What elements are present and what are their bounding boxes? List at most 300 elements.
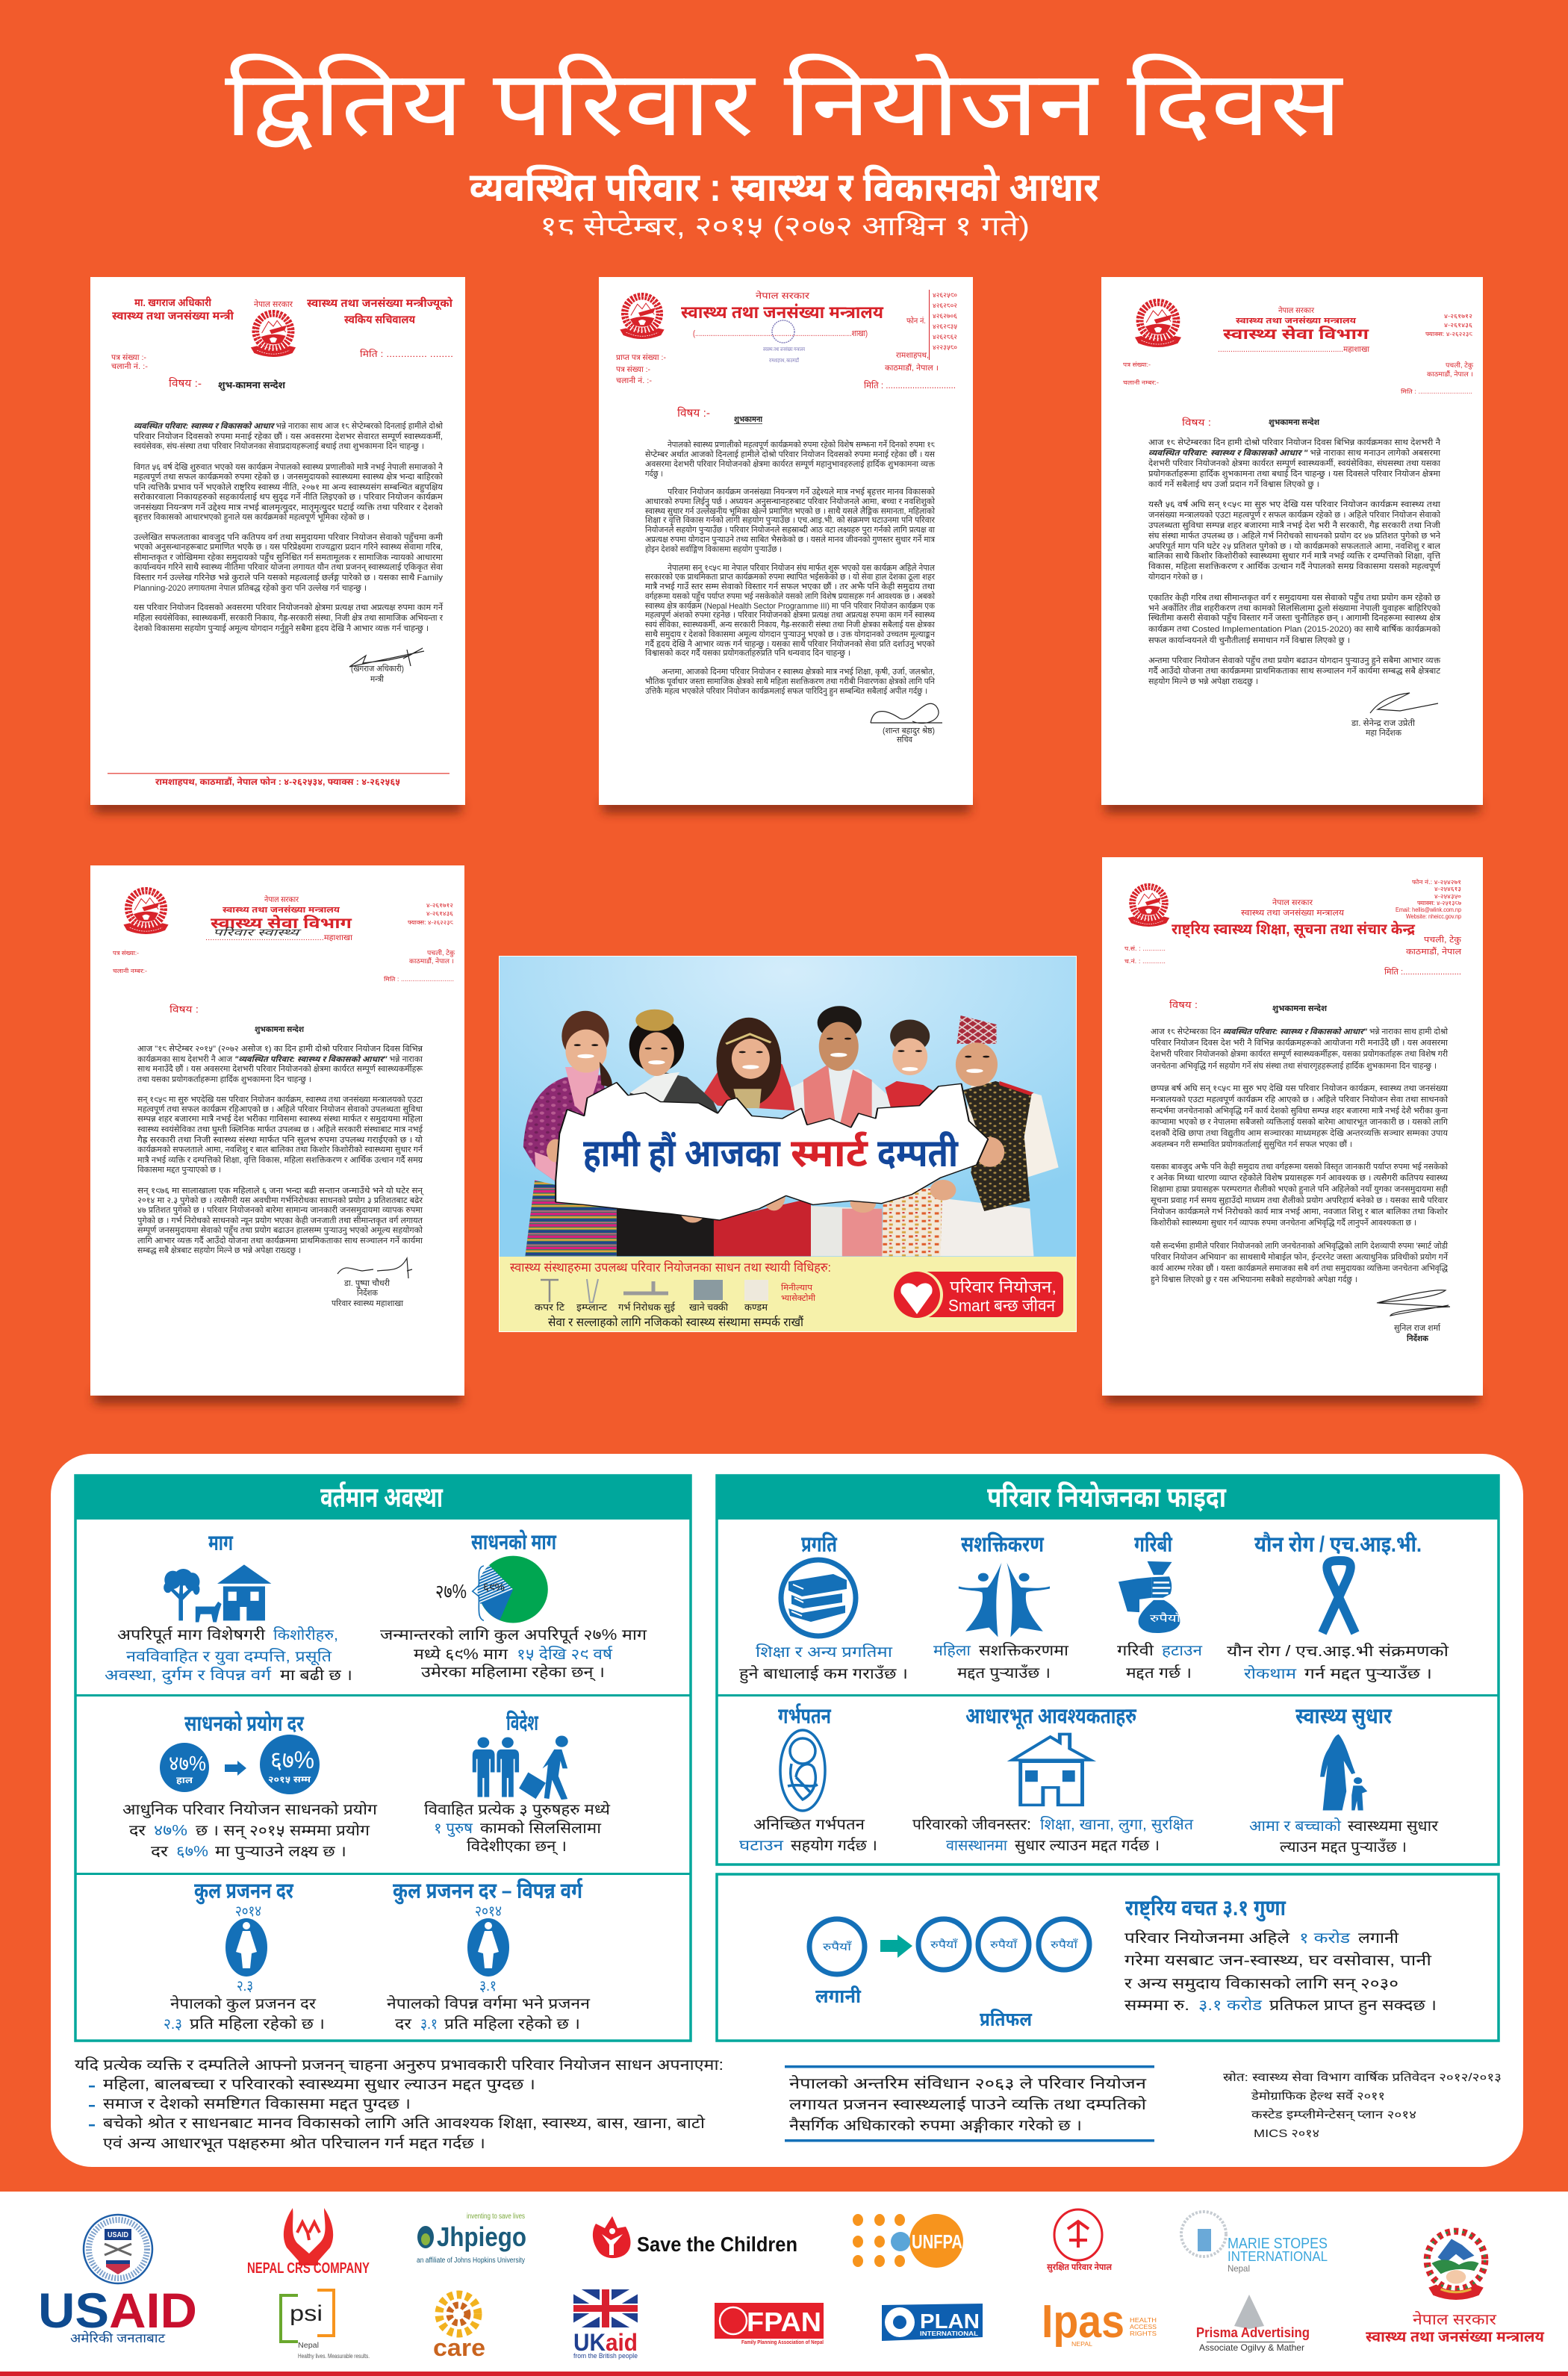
letter body text: उल्लेखित सफलताका बावजुद पनि कतिपय वर्ग तथा समुदायमा परिवार नियोजन सेवाको पहुँचमा कमी <box>134 532 443 543</box>
emblem: Nepal government <box>1128 886 1169 927</box>
letter body text: सम्पूर्ण जनसमुदायमा सेवाको पहुँच तथा प्रयोग बढाउन हालसम्म पुऱ्याउनु भएको अमूल्य सहयोगको <box>137 1225 423 1236</box>
letter body text: स्वास्थ्य सुधार गर्न उल्लेखनीय भूमिका खेल्ने प्रमाणित भएको छ । साथै यसले लैङ्गिक समानता, महिलाको <box>645 506 935 517</box>
letter body text: २०१४ मा २.३ पुगेको छ । त्यसैगरी यस अवधीमा गर्भनिरोधका साधनको प्रयोग ३ प्रतिशतबाट बढेर <box>137 1195 423 1205</box>
centre letterhead: शुभकामना सन्देश <box>1272 1003 1328 1014</box>
logo: Jhpiego: inventing to save lives <box>467 2212 525 2221</box>
letter body text: उत्तिकै महत्व भएकोले परिवार नियोजन कार्यक्रमलाई सफल पारिदिनु हुन सम्बन्धित सबैलाई अपील गर्दछु । <box>645 686 927 697</box>
department letterhead: पत्र संख्या:- <box>1123 361 1151 368</box>
heading: current status: वर्तमान अवस्था <box>320 1481 444 1514</box>
block: total fertility rate for the poor: ३.१ <box>420 2016 438 2033</box>
centre letterhead: Website: nheicc.gov.np <box>1406 913 1461 920</box>
letter body text: आज १८ सेप्टेम्बरका दिन हामी दोश्रो परिवार नियोजन दिवस बिभिन्न कार्यक्रमका साथ देशभरी नै <box>1148 438 1441 447</box>
diagram: investment to return: प्रतिफल <box>980 2008 1033 2030</box>
letter body text: देशभरी परिवार नियोजनको क्षेत्रमा कार्यरत सम्पूर्ण स्वास्थ्यकर्मीहरू, यसका प्रयोगकर्ताहरू तथा विशेष गरी <box>1151 1049 1448 1060</box>
division letterhead: नेपाल सरकार <box>264 895 299 904</box>
panel: letter from the health minister <box>90 277 465 812</box>
letter body text: आज १८ सेप्टेम्बरका दिन व्यवस्थित परिवार: स्वास्थ्य र विकासको आधार" भन्ने नाराका साथ हामी दोश्रो <box>1151 1027 1448 1036</box>
yellow strip of family planning methods: कण्डम <box>744 1301 768 1313</box>
department letterhead: ...........................................................महाशाखा <box>1218 346 1369 354</box>
block: basic needs: परिवारको जीवनस्तर: <box>912 1815 1031 1833</box>
minister letterhead: स्वकिय सचिवालय <box>344 314 415 326</box>
block: demand: मा बढी छ । <box>280 1666 352 1684</box>
logo: USAID seal <box>84 2215 152 2283</box>
letter body text: विगत ५६ वर्ष देखि शुरुवात भएको यस कार्यक्रम नेपालको स्वास्थ्य प्रणालीको मात्रै नभई नेपाली समाजको नै <box>134 462 444 472</box>
block: total fertility rate for the poor: दर <box>395 2016 412 2033</box>
text block: sources: स्रोत: स्वास्थ्य सेवा विभाग वार्षिक प्रतिवेदन २०१२/२०१३ <box>1223 2071 1502 2084</box>
logo: Ipas Nepal: NEPAL <box>1071 2341 1093 2348</box>
text block: if every person adopts family planning: यदि प्रत्येक व्यक्ति र दम्पतिले आफ्नो प्रजनन् चाहना अनुरुप प्रभावकारी परिवार नियोजन साधन अपनाएमा: <box>75 2056 724 2074</box>
block: abortion <box>739 1703 877 1854</box>
subtitle: व्यवस्थित परिवार : स्वास्थ्य र विकासको आधार <box>469 164 1100 210</box>
centre letterhead: च.नं. : ............ <box>1124 958 1166 965</box>
letter body text: गर्दै आउँदो योजना तथा कार्यक्रममा प्राथमिकताका साथ सञ्चालन गर्ने कार्यमा सम्बद्ध सबै क्षेत्रबाट <box>1148 665 1440 676</box>
ministry letterhead: शुभकामना <box>734 415 763 425</box>
icon: woman in oval <box>225 1918 267 1977</box>
letter body text: सन् १९५९ मा सुरु भएदेखि यस परिवार नियोजन कार्यक्रम, स्वास्थ्य तथा जनसंख्या मन्त्रालयको एउटा <box>137 1095 423 1104</box>
letter body text: जनसंख्या नियन्त्रण गर्ने उद्देश्य मात्र नभई बालमृत्युदर, मातृमृत्युदर घटाई व्यक्ति तथा परिवार र देशको <box>134 503 443 512</box>
letter body text: नियोजन कार्यक्रमले गर्भ निरोधको कार्य मात्र नभई आमा, नवजात शिशु र बाल बालिका तथा किशोर <box>1151 1207 1449 1216</box>
icon: tree, cow and house <box>164 1564 271 1622</box>
diagram: investment to return: रुपैयाँ <box>823 1940 852 1953</box>
slogan: हामी हौं आजका <box>583 1131 781 1175</box>
letter body text: पनि त्यत्तिकै प्रभाव पर्ने भएकोले राष्ट्रिय स्वास्थ्य नीति, २०७१ मा अन्य स्वास्थ्यसंग सम्बन्धित बहुपक्षिय <box>134 482 444 493</box>
letter body text: दशकौं देखि छापा तथा विद्युतीय आम सञ्चारका माध्यमहरू देखि अन्तरव्यक्ति सञ्चार सम्मका उपाय <box>1151 1128 1449 1138</box>
centre letterhead: Email: hellis@wlink.com.np <box>1396 906 1461 913</box>
yellow strip of family planning methods: खाने चक्की <box>689 1301 729 1313</box>
letter footer: रामशाहपथ, काठमाडौं, नेपाल फोन : ४-२६२५३४, फ्याक्स : ४-२६२५६५ <box>155 776 400 787</box>
letter body text: महत्वपूर्ण तथा सफल कार्यक्रमको रुपमा रहेको छ । जनसमुदायको स्वास्थ्यमा स्वास्थ्य क्षेत्र भन्दा बाहिरको <box>134 472 443 482</box>
emblem: Nepal government <box>123 891 169 934</box>
faces <box>574 1038 989 1058</box>
department letterhead: स्वास्थ्य तथा जनसंख्या मन्त्रालय <box>1236 316 1357 326</box>
letter body text: कार्यक्रमका साथ देशभरी नै आज "व्यवस्थित परिवार: स्वास्थ्य र विकासको आधार" भन्ने नाराका <box>137 1054 423 1064</box>
block: poverty <box>1117 1531 1203 1682</box>
division letterhead: ४-२६१७१२ <box>426 902 453 909</box>
callout: constitution: नेपालको अन्तरिम संविधान २०६३ ले परिवार नियोजन <box>789 2074 1147 2092</box>
callout: constitution: लगायत प्रजनन स्वास्थ्यलाई पाउने व्यक्ति तथा दम्पतिको <box>789 2095 1147 2113</box>
letter body text: व्यवस्थित परिवार: स्वास्थ्य र विकासको आधार " भन्ने नाराका साथ मनाउन लागेको अबसरमा <box>1148 448 1440 458</box>
letter body text: किशोरीको स्वास्थ्यमा सुधार गर्न व्यापक रुपमा जनचेतना अभिवृद्धि गर्दै लानुपर्ने आवश्यकता छ । <box>1151 1218 1416 1228</box>
letter body text: हुने विश्वास लिएको छु र यस अभियानमा सबैको सहयोगको अपेक्षा गर्दछु । <box>1151 1275 1357 1285</box>
block: abortion: सहयोग गर्दछ । <box>791 1836 877 1854</box>
department letterhead: फ्याक्स: ४-२६२२३८ <box>1425 331 1472 338</box>
letter body text: परिवार नियोजन अभियान' का साथसाथै मोबाईल फोन, ईन्टरनेट जस्ता अत्याधुनिक प्रविधीको प्रयोग गर्ने <box>1151 1252 1449 1262</box>
minister letterhead: शुभ-कामना सन्देश <box>218 379 286 392</box>
yellow strip of family planning methods: इम्प्लान्ट <box>576 1301 607 1313</box>
panel: campaign poster <box>499 956 1077 1332</box>
logo: UKaid: UKaid <box>573 2329 638 2356</box>
logo: USAID seal: USAID <box>108 2231 128 2239</box>
letter body text: कार्यक्रम तथा Costed Implementation Plan (2015-2020) का साथै बार्षिक कार्यक्रमको <box>1148 624 1440 634</box>
signature block: महा निर्देशक <box>1366 728 1402 738</box>
text block: sources: डेमोग्राफिक हेल्थ सर्वे २०११ <box>1251 2089 1385 2103</box>
letter body text: अपरिपूर्त माग पनि घटेर २५ प्रतिशत पुगेको छ । यो कार्यक्रमको सफलताले आमा, नवशिशु र बाल <box>1148 541 1441 552</box>
ministry letterhead: (...................................................................................शाखा) <box>693 329 868 338</box>
panel: letter from the health secretary <box>599 277 973 812</box>
icon: mother and child <box>1320 1734 1367 1810</box>
text: national savings: ३.१ करोड <box>1198 1996 1262 2014</box>
division letterhead: विषय : <box>169 1004 199 1015</box>
block: health improvement: स्वास्थ्यमा सुधार <box>1348 1818 1439 1835</box>
centre letterhead: नेपाल सरकार <box>1272 898 1313 907</box>
text: national savings: सम्ममा रु. <box>1124 1997 1189 2014</box>
block: abortion: गर्भपतन <box>778 1703 831 1729</box>
letter body text: बालिका साथै किशोर किशोरीको स्वास्थ्यमा सुधार गर्न मात्रै नभई व्यक्ति र दम्पत्तिको शिक्षा, वृत्ति <box>1148 551 1440 561</box>
yellow strip of family planning methods: स्वास्थ्य संस्थाहरुमा उपलब्ध परिवार नियोजनका साधन तथा स्थायी विधिहरु: <box>510 1260 831 1275</box>
text: national savings: गरेमा यसबाट जन-स्वास्थ्य, घर वसोवास, पानी <box>1124 1951 1432 1969</box>
signature block <box>349 648 424 684</box>
block: contraceptive demand: उमेरका महिलामा रहेका छन् । <box>421 1663 605 1682</box>
letter body text: स्वयं सेविका, स्वास्थ्यकर्मी, अन्य सरकारी निकाय, गैह्र-सरकारी संस्था तथा निजी क्षेत्रका सबैलाई यस क्षेत्रका <box>645 620 935 629</box>
block: demand: किशोरीहरु, <box>273 1626 338 1643</box>
logo: CARE <box>433 2295 485 2361</box>
block: total fertility rate for the poor: ३.१ <box>479 1978 497 1994</box>
signature block <box>332 1258 412 1308</box>
emblem: Nepal government <box>620 296 665 339</box>
letter body text: देशभरी परिवार नियोजनको क्षेत्रमा कार्यरत सम्पूर्ण स्वास्थ्यकर्मी, स्वयंसेविका, संघसस्था तथा यसका <box>1148 458 1440 469</box>
logo: UNFPA: UNFPA <box>912 2230 962 2253</box>
division letterhead: पचली, टेकु <box>427 948 455 957</box>
letter body text <box>645 440 936 697</box>
letter body text: सन्दर्भमा जनचेतनाको अभिवृद्धि गर्ने कार्य देशको सुविधा सम्पन्न शहर बजारमा मात्रै नभई देशै भरीका कुना <box>1151 1106 1448 1116</box>
text: national savings: राष्ट्रिय वचत ३.१ गुणा <box>1125 1895 1287 1922</box>
letter body text: आधारको रुपमा लिईनु पर्छ । अध्ययन अनुसन्धानहरुबाट परिवार नियोजनले आमा, बच्चा र नवशिशुको <box>645 497 935 506</box>
ministry letterhead: चलानी नं. :- <box>616 376 652 385</box>
block: poverty: मद्दत गर्छ । <box>1126 1664 1192 1682</box>
block: contraceptive demand <box>380 1529 647 1682</box>
yellow strip of family planning methods: सेवा र सल्लाहको लागि नजिकको स्वास्थ्य संस्थामा सम्पर्क राखौं <box>548 1315 804 1329</box>
panel: letter from the health education centre <box>1102 857 1483 1403</box>
division letterhead: स्वास्थ्य तथा जनसंख्या मन्त्रालय <box>223 905 340 915</box>
block: contraceptive demand: १५ देखि २९ वर्ष <box>517 1645 613 1663</box>
department letterhead: ४-२६१४३६ <box>1444 322 1472 329</box>
slogan: दम्पती <box>877 1132 959 1175</box>
ministry letterhead: ४२६२७०६ <box>933 312 957 320</box>
division letterhead: ...................................................महाशाखा <box>205 934 352 942</box>
minister letterhead: मिति : .............. ........ <box>360 348 453 359</box>
signature block: निर्देशक <box>1407 1334 1429 1343</box>
panel: logo strip <box>0 2192 1568 2376</box>
text: national savings: र अन्य समुदाय विकासको लागि सन् २०३० <box>1124 1974 1399 1993</box>
letter body text: यसै सन्दर्भमा हामीले परिवार नियोजनको लागि जनचेतनाको अभिवृद्धिको लागि देशव्यापी रुपमा 'स्मार्ट जोडी <box>1151 1241 1448 1251</box>
logo: FPAN: FPAN <box>747 2307 821 2337</box>
letter body text: सरोकारवाला निकायहरुको सहकार्यलाई थप सुदृढ गर्ने नीति लिइएको छ । परिवार नियोजन कार्यक्रम <box>134 492 443 502</box>
letter body text: नेपालमा सन् १९५९ मा नेपाल परिवार नियोजन संघ मार्फत शुरू भएको यस कार्यक्रम अहिले नेपाल <box>668 563 936 573</box>
logo: CARE: care <box>433 2334 485 2361</box>
logo: UKaid: from the British people <box>573 2352 638 2360</box>
block: contraceptive use rate: छ । सन् २०१५ सम्ममा प्रयोग <box>196 1821 370 1840</box>
ministry letterhead: मिति : ............................. <box>864 379 956 391</box>
logo: Ipas Nepal: ACCESS <box>1130 2324 1157 2330</box>
division letterhead: फ्याक्स: ४-२६२२३८ <box>408 919 453 926</box>
signature block: निर्देशक <box>357 1288 378 1298</box>
block: demand: माग <box>208 1531 233 1555</box>
letter body text: भने अर्कोतिर तीव्र शहरीकरण तथा कामको सिलसिलामा ठूलो संख्यामा नेपाली युवाहरू बाहिरिएको <box>1148 603 1440 614</box>
logo: Ipas Nepal: RIGHTS <box>1130 2330 1157 2337</box>
block: abroad: कामको सिलसिलामा <box>480 1819 602 1837</box>
ministry letterhead: फोन नं. <box>906 317 926 326</box>
letter body text: यस्तै ५६ वर्ष अघि सन् १९५९ मा सुरु भए देखि यस परिवार नियोजन कार्यक्रम स्वास्थ्य तथा <box>1148 500 1440 509</box>
logo: Plan International: PLAN <box>920 2310 980 2333</box>
letter body text: सम्पन्न शहर बजारमा मात्रै नभई देश भरीका गाविसमा स्वास्थ्य संस्था मार्फत र समुदायमा महिला <box>137 1114 423 1124</box>
letter body text: सीमान्तकृत र जोखिममा रहेका समुदायको पहुँच सुनिश्चित गर्न समतामूलक र सामाजिक न्यायको आधारमा <box>134 552 443 563</box>
logo: Marie Stopes International: MARIE STOPES <box>1228 2236 1328 2252</box>
block: total fertility rate for the poor: नेपालको विपन्न वर्गमा भने प्रजनन <box>387 1994 591 2012</box>
letter body text: विश्वासको कदर गर्दै यसका प्रयोगकर्ताहरुप्रति पनि धन्यवाद दिन चाहन्छु । <box>645 648 850 658</box>
block: health improvement: ल्याउन मद्दत पुऱ्याउँछ । <box>1280 1838 1407 1856</box>
letter body text: अन्तमा परिवार नियोजन सेवाको पहुँच तथा प्रयोग बढाउन योगदान पुऱ्याउनु हुने सबैमा आभार व्यक्त <box>1148 655 1441 666</box>
letter body text: अवसरमा देशभरी परिवार नियोजनको क्षेत्रमा कार्यरत सम्पूर्ण महानुभावहरुलाई हार्दिक शुभकामना व्यक्त <box>645 459 936 470</box>
block: basic needs: वासस्थानमा <box>946 1838 1008 1854</box>
centre letterhead: मिति :......................... <box>1384 967 1461 977</box>
letter body text: महिला स्वयंसेविका, स्वास्थ्यकर्मी, सरकारी निकाय, गैह्र-सरकारी संस्था, निजी क्षेत्र तथा सामाजिक अभियन्ता र <box>134 613 443 623</box>
centre letterhead: पचली, टेकु <box>1424 935 1462 945</box>
department letterhead <box>1123 306 1474 428</box>
emblem: Nepal government <box>251 314 296 357</box>
chart: 47% now to 67% by 2015: हाल <box>176 1775 193 1785</box>
badge: family planning smart life: परिवार नियोजन, <box>950 1278 1057 1296</box>
logo: FPAN: Family Planning Association of Nepal <box>741 2340 824 2345</box>
text: national savings: १ करोड <box>1299 1929 1350 1947</box>
block: contraceptive use rate: आधुनिक परिवार नियोजन साधनको प्रयोग <box>122 1800 378 1819</box>
block: contraceptive use rate: साधनको प्रयोग दर <box>184 1711 305 1736</box>
block: contraceptive use rate: दर <box>151 1844 169 1860</box>
block: STI and HIV <box>1227 1531 1449 1683</box>
chart: 47% now to 67% by 2015: ६७% <box>270 1747 314 1773</box>
logo: UKaid <box>573 2289 638 2360</box>
block: empowerment: सशक्तिकरणमा <box>979 1641 1069 1659</box>
letter body text: भौतिक पूर्वाधार जस्ता सामाजिक क्षेत्रको साथै महिला सशक्तिकरण तथा गरीबी निवारणका क्षेत्रको लागि पनि <box>645 677 936 687</box>
block: progress: शिक्षा र अन्य प्रगतिमा <box>756 1643 893 1661</box>
minister letterhead: नेपाल सरकार <box>254 299 293 309</box>
logo: Prisma Advertising <box>1196 2295 1310 2353</box>
logo: Nepal CRS Company <box>247 2208 370 2277</box>
logo: Nepal CRS Company: NEPAL CRS COMPANY <box>247 2260 370 2277</box>
block: total fertility rate: २.३ <box>237 1978 253 1994</box>
block: health improvement <box>1249 1704 1439 1856</box>
letter body text: अन्तमा, आजको दिनमा परिवार नियोजन र स्वास्थ्य क्षेत्रको मात्र नभई शिक्षा, कृषी, उर्जा, जलश्रोत, <box>662 667 935 677</box>
block: total fertility rate: प्रति महिला रहेको छ । <box>190 2015 325 2033</box>
signature block: डा. सेनेन्द्र राज उप्रेती <box>1351 718 1415 728</box>
logo: Save the Children <box>593 2216 797 2258</box>
department letterhead: ४-२६१७१२ <box>1444 313 1472 320</box>
heading: benefits: परिवार नियोजनका फाइदा <box>987 1481 1227 1514</box>
department letterhead: मिति : ............................ <box>1401 388 1472 395</box>
ministry letterhead: ४२६२८६२ <box>933 333 957 340</box>
letter body text: मन्त्रालयको एउटा महत्वपूर्ण कार्यक्रम रहि आएको छ । अहिले परिवार नियोजन सेवा तथा साधनको <box>1151 1095 1448 1105</box>
block: demand <box>105 1531 352 1685</box>
block: STI and HIV: यौन रोग / एच.आइ.भी. <box>1254 1531 1422 1557</box>
division letterhead: ४-२६१४३६ <box>426 910 453 917</box>
letter body text: Planning-2020 लगायतमा नेपाल प्रतिबद्ध रहेको कुरा पनि उल्लेख गर्न चाहन्छु । <box>134 583 367 593</box>
letter body text: परिवार नियोजन कार्यक्रम जनसंख्या नियन्त्रण गर्ने उद्देश्यले मात्र नभई बृहत्तर मानव विकासको <box>668 487 935 497</box>
block: health improvement: आमा र बच्चाको <box>1249 1817 1342 1835</box>
ministry letterhead: ४२६२८०२ <box>933 302 957 309</box>
panel: national savings <box>717 1874 1499 2041</box>
map of Nepal banner <box>556 1083 988 1220</box>
letter body text: शिक्षामा हाम्रा प्रयासहरू परम्परागत शैलीको भएको हुनाले पनि अहिलेको नयाँ युगका जनसमुदायमा सही <box>1151 1184 1448 1195</box>
block: contraceptive demand: जन्मान्तरको लागि कुल अपरिपूर्त २७% माग <box>380 1626 647 1644</box>
icon: books in circle <box>781 1560 856 1636</box>
letter body text: काप्चामा भएको छ र नेपालमा सबैजसो व्यक्तिलाई यसको बारेमा आधारभूत जानकारी छ । यसको लागि <box>1151 1117 1449 1128</box>
letter body text: विस्तार गर्न उल्लेख गरिनेछ भन्ने कुराले पनि यसको महत्वलाई छर्लङ्ग पारेको छ । यसका साथै Family <box>134 573 444 582</box>
logo: Prisma Advertising: Associate Ogilvy & Mather <box>1199 2342 1304 2353</box>
ministry letterhead: विषय :- <box>677 407 710 420</box>
block: total fertility rate for the poor: प्रति महिला रहेको छ । <box>444 2015 580 2033</box>
letter body text: वर्गहरूमा यसको पहुँच पर्याप्त रुपमा भई नसकेकोले यसको लागि विशेष प्रयासहरू गर्न आवश्यक छ । अबको <box>645 591 935 602</box>
letter body text: सम्बद्ध सबै क्षेत्रबाट सहयोग मिल्ने छ भन्ने अपेक्षा राख्दछु । <box>137 1245 301 1255</box>
callout: constitution: नैसर्गिक अधिकारको रुपमा अङ्गीकार गरेको छ । <box>789 2115 1082 2134</box>
logo: USAID wordmark: अमेरिकी जनताबाट <box>70 2330 165 2345</box>
block: abroad <box>424 1709 610 1856</box>
ministry letterhead: प्राप्त पत्र संख्या :- <box>616 353 666 362</box>
block: abortion: घटाउन <box>739 1838 784 1854</box>
letter body text: परिवार नियोजन दिवसको रुपमा मनाई रहेका छौं । यस अवसरमा देशभर सेवारत सम्पूर्ण स्वास्थ्यकर्मी, <box>134 432 443 442</box>
letter body text: नेपालको स्वास्थ्य प्रणालीको महत्वपूर्ण कार्यक्रमको रुपमा रहेको विशेष सम्झना गर्ने दिनको रुपमा १८ <box>668 440 935 450</box>
letter body text: गैह्र सरकारी तथा निजी स्वास्थ्य संस्था मार्फत पनि सुलभ रुपमा उपलब्ध गराईएको छ । यो <box>137 1135 423 1145</box>
text: national savings: लगानी <box>1358 1929 1399 1947</box>
block: STI and HIV: रोकथाम <box>1244 1664 1297 1682</box>
logo: Plan International <box>882 2304 983 2341</box>
centre letterhead: राष्ट्रिय स्वास्थ्य शिक्षा, सूचना तथा संचार केन्द्र <box>1172 920 1416 939</box>
block: STI and HIV: यौन रोग / एच.आइ.भी संक्रमणको <box>1227 1642 1449 1660</box>
centre letterhead: विषय : <box>1169 999 1198 1010</box>
ministry letterhead <box>616 290 957 425</box>
yellow strip of family planning methods <box>500 1257 1076 1331</box>
block: basic needs: शिक्षा, खाना, लुगा, सुरक्षित <box>1040 1815 1194 1834</box>
signature block: सचिव <box>897 735 913 744</box>
diagram: investment to return: रुपैयाँ <box>990 1938 1018 1950</box>
block: abroad: विदेश <box>506 1709 539 1735</box>
signature block: परिवार स्वास्थ्य महाशाखा <box>332 1299 403 1308</box>
logo: UNFPA <box>853 2214 963 2268</box>
signature block <box>871 703 942 744</box>
block: contraceptive demand: मध्ये ६९% माग <box>414 1645 508 1663</box>
centre letterhead: प.सं. : ............ <box>1124 945 1166 952</box>
letter body text: साथ मनाउँदै छौं । यस अवसरमा देशभरी परिवार नियोजनको क्षेत्रमा कार्यरत सम्पूर्ण स्वास्थ्यकर्मीहरू <box>137 1063 423 1075</box>
letter body text: विकासमा मद्दत पुऱ्याएको छ । <box>137 1165 221 1175</box>
block: contraceptive use rate: ४७% <box>154 1823 187 1839</box>
block: contraceptive use rate: मा पुऱ्याउने लक्ष्य छ । <box>215 1842 346 1861</box>
letter body text: कार्य आरम्भ गरेका छौं । यस्ता कार्यक्रमले समाजका सबै वर्ग तथा समुदायका व्यक्तिमा जनचेतना अभिवृद्धि <box>1151 1263 1448 1273</box>
text block: if every person adopts family planning <box>75 2056 724 2153</box>
text block: if every person adopts family planning: एवं अन्य आधारभूत पक्षहरुमा श्रोत परिचालन गर्न मद्दत गर्दछ । <box>103 2134 485 2153</box>
text: national savings <box>1124 1895 1437 2015</box>
callout: constitution <box>785 2065 1154 2142</box>
block: progress <box>739 1531 908 1684</box>
block: abroad: विवाहित प्रत्येक ३ पुरुषहरु मध्ये <box>424 1800 610 1819</box>
ministry letterhead: रामशाहपथ, <box>896 352 929 360</box>
panel: letter from the family health division <box>90 865 464 1403</box>
letter body text: संघ संस्था मार्फत उपलब्ध छ । अहिले गर्भ निरोधको साधनको प्रयोग दर ४७ प्रतिशत पुगेको छ भने <box>1148 531 1441 541</box>
signature block <box>1377 1290 1450 1343</box>
icon: hand holding money bag: रुपैयाँ <box>1150 1611 1181 1624</box>
minister letterhead: स्वास्थ्य तथा जनसंख्या मन्त्री <box>112 310 234 323</box>
panel: benefits of family planning <box>716 1475 1499 1865</box>
hands <box>547 1137 1004 1223</box>
text: national savings: प्रतिफल प्राप्त हुन सक्दछ । <box>1269 1996 1437 2015</box>
logo: Save the Children: Save the Children <box>637 2233 797 2256</box>
logo: Ipas Nepal: HEALTH <box>1130 2317 1157 2324</box>
chart: 47% now to 67% by 2015 <box>160 1735 320 1794</box>
title: द्वितिय परिवार नियोजन दिवस <box>225 53 1344 155</box>
minister letterhead: विषय :- <box>169 377 202 389</box>
letter body text: एकातिर केही गरिब तथा सीमान्तकृत वर्ग र समुदायमा यस सेवाको पहुँच तथा प्रयोग कम रहेको छ <box>1148 592 1440 603</box>
letter body text: सूचना प्रवाह गर्न समय सुहाउँदो माध्यम तथा शैलीको प्रयोग अपरिहार्य बनेको छ । यसका साथै परिवार <box>1151 1195 1449 1206</box>
minister letterhead: स्वास्थ्य तथा जनसंख्या मन्त्रीज्यूको <box>307 297 453 311</box>
panel: white infographic card <box>51 1454 1523 2167</box>
block: abroad: १ पुरुष <box>434 1820 473 1838</box>
division letterhead: परिवार स्वास्थ्य <box>213 927 302 938</box>
letter body text: अवलम्बन गरी सम्भावित प्रयोगकर्तालाई सुसुचित गर्न सफल भएका छौं । <box>1151 1139 1352 1149</box>
ministry letterhead: पत्र संख्या :- <box>616 365 650 374</box>
letter body text: जनसंख्या मन्त्रालयको एउटा महत्वपूर्ण र सफल कार्यक्रम रहेको छ । अहिले परिवार नियोजन सेवाको <box>1148 510 1440 520</box>
block: demand: अवस्था, दुर्गम र विपन्न वर्ग <box>105 1666 272 1685</box>
date line: १८ सेप्टेम्बर, २०१५ (२०७२ आश्विन १ गते) <box>540 211 1030 241</box>
letter body text: बृहत्तर विकासको आधारभएको हुनाले यस कार्यक्रमको महत्वपूर्ण भूमिका रहेको छ । <box>134 512 370 523</box>
department letterhead: काठमाडौं, नेपाल । <box>1427 370 1473 378</box>
logo: Ipas Nepal: Ipas <box>1042 2296 1124 2348</box>
block: total fertility rate for the poor: २०१४ <box>475 1903 502 1920</box>
ministry letterhead: ४२६२९३५ <box>933 323 957 330</box>
block: STI and HIV: गर्न मद्दत पुऱ्याउँछ । <box>1304 1664 1432 1683</box>
block: total fertility rate: २.३ <box>164 2016 182 2033</box>
letter body text: मात्रै नभई व्यक्ति र दम्पत्तिको शिक्षा, वृत्ति विकास, महिला सशक्तिकरण र आर्थिक उत्थान गर्दै समग्र <box>137 1155 423 1165</box>
letter body text: गर्दछु । <box>645 469 663 479</box>
block: poverty: गरिवी <box>1117 1641 1154 1659</box>
division letterhead: पत्र संख्या:- <box>113 950 139 957</box>
centre letterhead: फोन नं.: ४-२५४२७१ <box>1412 879 1461 886</box>
letter body text: सन् १९७६ मा सालाखाला एक महिलाले ६ जना भन्दा बढी सन्तान जन्माउँथे भने यो घटेर सन् <box>137 1185 424 1195</box>
chart: 47% now to 67% by 2015: २०१५ सम्म <box>268 1774 311 1785</box>
minister letterhead: मा. खगराज अधिकारी <box>134 296 212 308</box>
badge: family planning smart life: Smart बन्छ जीवन <box>948 1296 1056 1315</box>
logo: USAID wordmark: USAID <box>38 2283 197 2338</box>
logo: Government of Nepal emblem <box>1366 2231 1544 2345</box>
stamp <box>763 320 806 364</box>
block: total fertility rate: नेपालको कुल प्रजनन दर <box>170 1994 317 2013</box>
letter body text: महत्वपूर्ण तथा सफल कार्यक्रम रहिआएको छ । अहिले परिवार नियोजन सेवाको उपलब्धता सुविधा <box>137 1104 423 1115</box>
logo: FPAN <box>715 2303 824 2345</box>
block: demand: नवविवाहित र युवा दम्पत्ति, प्रसूति <box>126 1647 332 1666</box>
letter body text: अप्रत्यक्ष रुपमा योगदान पुऱ्याउने तथ्य साबित भैसकेको छ । यसले मानव जीवनको गुणस्तर सुधार गर्ने मात्र <box>645 535 936 544</box>
badge: family planning smart life <box>894 1270 1063 1319</box>
block: progress: प्रगति <box>801 1531 838 1557</box>
letter body text: देशको विकासमा सहयोग पुऱ्याई अमूल्य योगदान गर्नुहुने सबैमा हृदय देखि नै आभार व्यक्त गर्न चाहन्छु । <box>134 623 429 634</box>
ministry letterhead: ४२२३५८० <box>933 343 957 351</box>
letter body text: स्वास्थ्य स्वयंसेविका तथा घुम्ती क्लिनिक मार्फत उपलब्ध छ । अहिले सरकारी संस्थाबाट मात्र नभई <box>137 1125 423 1134</box>
letter body text: स्थितीमा कसरी सेवाको पहुँच विस्तार गर्ने जस्ता चुनौतिहरु छन् । आगामी दिनहरूमा स्वास्थ्य क्षेत्र <box>1148 612 1441 623</box>
ministry letterhead: स्वास्थ्य तथा जनसंख्या मन्त्रालय <box>681 302 883 322</box>
letter body text: तथा यसका प्रयोगकर्ताहरूमा हार्दिक शुभकामना दिन चाहन्छु । <box>137 1075 311 1084</box>
block: total fertility rate: २०१४ <box>235 1903 261 1920</box>
logo: PSI Nepal: psi <box>290 2301 323 2326</box>
letter body text: महत्वपूर्ण अंशको रुपमा रहनेछ । परिवार नियोजनको क्षेत्रमा प्रत्यक्ष तथा अप्रत्यक्ष रुपमा काम गर्ने स्वास्थ्य <box>645 610 936 621</box>
letter body text: नियोजनले सहयोग पुऱ्याउँछ । परिवार नियोजनले सहस्राब्दी आठ वटा लक्ष्यहरु पुरा गर्नको लागि प्रत्यक्ष वा <box>645 524 935 535</box>
logo: Marie Stopes International: INTERNATIONAL <box>1228 2249 1328 2264</box>
centre letterhead: स्वास्थ्य तथा जनसंख्या मन्त्रालय <box>1241 908 1345 918</box>
block: health improvement: स्वास्थ्य सुधार <box>1295 1704 1393 1730</box>
division letterhead: चलानी नम्बर:- <box>113 968 147 974</box>
centre letterhead: फ्याक्स: ४-२५१३८७ <box>1417 900 1461 906</box>
people holding the map <box>523 1006 1059 1256</box>
department letterhead: चलानी नम्बर:- <box>1123 379 1159 386</box>
diagram: investment to return: रुपैयाँ <box>1051 1938 1078 1950</box>
logo: Government of Nepal emblem: नेपाल सरकार <box>1413 2310 1497 2328</box>
block: contraceptive demand: २७% <box>435 1580 467 1602</box>
letter body text: यस परिवार नियोजन दिवसको अवसरमा परिवार नियोजनको क्षेत्रमा प्रत्यक्ष तथा अप्रत्यक्ष रुपमा काम गर्ने <box>134 603 444 612</box>
minister letterhead: पत्र संख्या :- <box>111 353 146 362</box>
